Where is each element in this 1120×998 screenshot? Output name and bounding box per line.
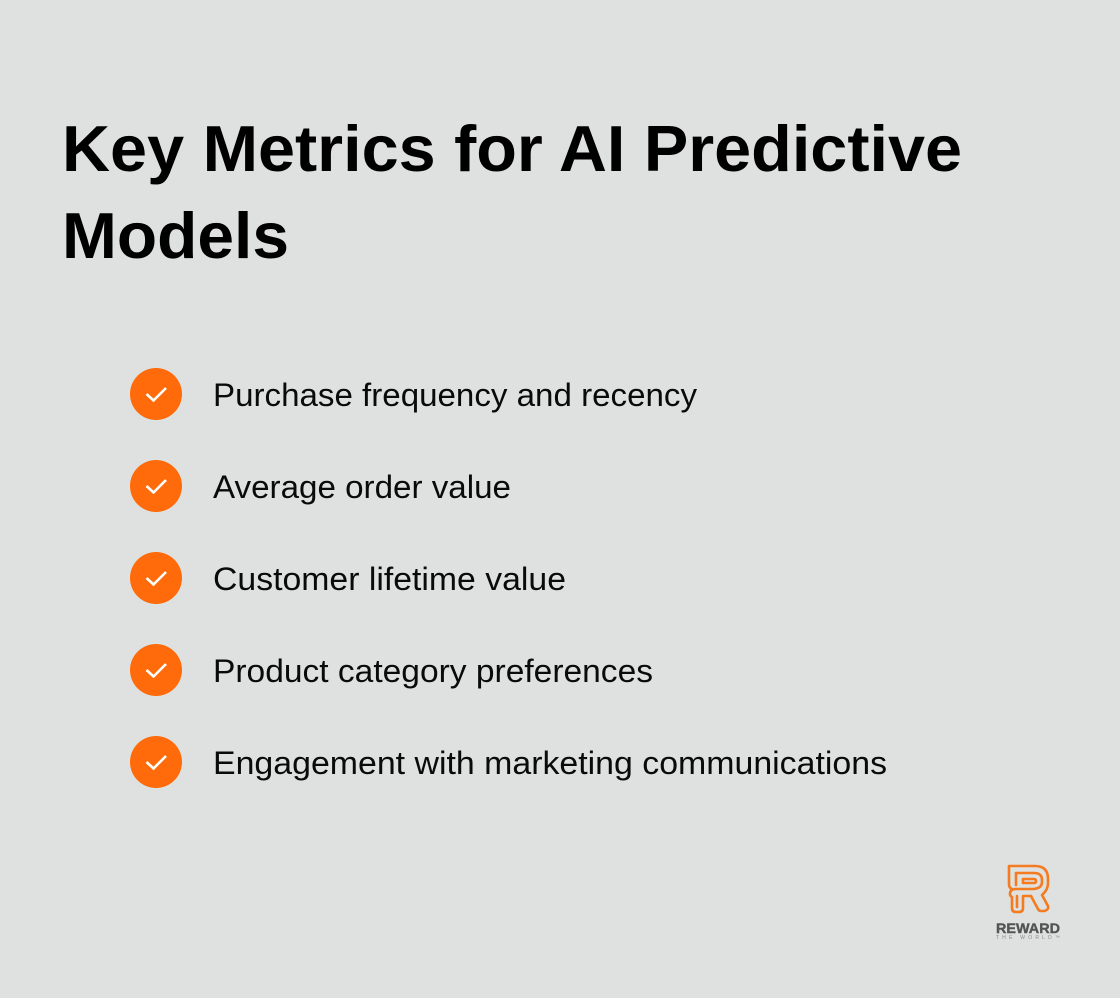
checklist of key metrics xyxy=(130,368,887,788)
item: customer lifetime value xyxy=(130,552,566,604)
item: engagement with marketing communications: Engagement with marketing communications xyxy=(213,745,887,781)
item: engagement with marketing communications xyxy=(130,736,887,788)
item: customer lifetime value: Customer lifetime value xyxy=(213,561,566,597)
wordmark: REWARD xyxy=(996,920,1060,936)
item: average order value: Average order value xyxy=(213,469,511,505)
icon: stylised R xyxy=(1009,866,1048,912)
item: product category preferences xyxy=(130,644,653,696)
item: average order value xyxy=(130,460,511,512)
item: purchase frequency and recency: Purchase frequency and recency xyxy=(213,377,697,413)
logo: Reward the World xyxy=(996,866,1060,941)
item: purchase frequency and recency xyxy=(130,368,697,420)
title: Models xyxy=(62,199,289,272)
item: product category preferences: Product category preferences xyxy=(213,653,653,689)
title: Key Metrics for AI Predictive xyxy=(62,112,962,185)
tagline: THE WORLD™ xyxy=(996,935,1060,941)
title xyxy=(62,112,962,272)
